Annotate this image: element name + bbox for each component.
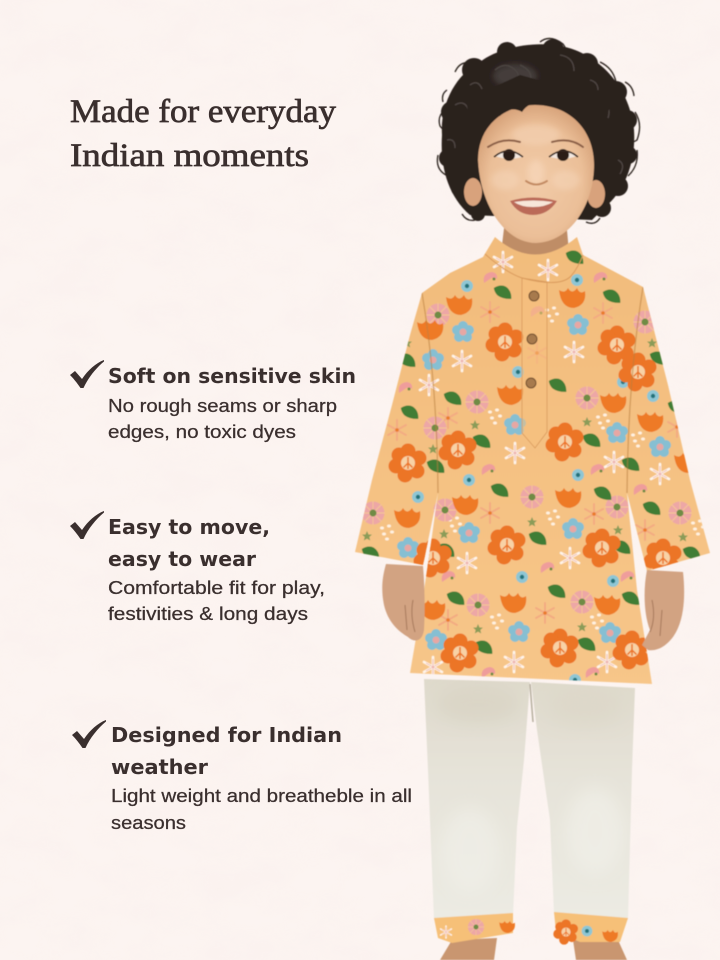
feature description: seasons bbox=[111, 813, 186, 833]
title: Made for everyday bbox=[70, 94, 337, 130]
kurta bbox=[355, 237, 710, 686]
ears bbox=[464, 178, 605, 208]
feature: designed for Indian weather bbox=[72, 720, 412, 833]
neck bbox=[500, 220, 570, 262]
feature heading: weather bbox=[111, 755, 209, 779]
kurta collar bbox=[485, 254, 583, 283]
trousers bbox=[424, 679, 635, 920]
kurta placket bbox=[522, 278, 547, 448]
kurta floral print bbox=[360, 248, 705, 686]
hair fringe bbox=[466, 75, 612, 150]
trouser cuffs bbox=[434, 912, 628, 945]
eyes bbox=[494, 149, 578, 161]
feature heading: Easy to move, bbox=[108, 515, 270, 539]
cheeks highlight bbox=[491, 125, 580, 190]
icon: check mark bbox=[72, 720, 106, 748]
hands bbox=[382, 564, 684, 650]
feet bbox=[440, 938, 627, 960]
child figure in kurta bbox=[355, 38, 710, 960]
feature description: festivities & long days bbox=[108, 604, 308, 624]
feature description: No rough seams or sharp bbox=[108, 396, 337, 416]
feature heading: Soft on sensitive skin bbox=[108, 364, 356, 388]
eyebrows bbox=[488, 140, 583, 147]
feature heading: easy to wear bbox=[108, 547, 257, 571]
feature heading bbox=[108, 515, 270, 571]
title: Indian moments bbox=[70, 138, 309, 174]
face bbox=[466, 75, 612, 243]
nose bbox=[526, 160, 547, 184]
feature description: edges, no toxic dyes bbox=[108, 422, 296, 442]
feature description bbox=[108, 396, 337, 442]
icon: check mark bbox=[70, 511, 104, 539]
icon: check mark bbox=[70, 360, 104, 388]
feature heading: Designed for Indian bbox=[111, 723, 342, 747]
feature description bbox=[108, 578, 325, 624]
title bbox=[70, 94, 337, 174]
feature description: Light weight and breatheble in all bbox=[111, 786, 412, 806]
feature: soft on sensitive skin bbox=[70, 360, 356, 442]
feature: easy to move bbox=[70, 511, 325, 624]
hair bbox=[437, 38, 640, 223]
feature description: Comfortable fit for play, bbox=[108, 578, 325, 598]
feature description bbox=[111, 786, 412, 833]
kurta buttons bbox=[526, 291, 539, 388]
feature heading bbox=[111, 723, 342, 779]
mouth bbox=[510, 198, 557, 215]
